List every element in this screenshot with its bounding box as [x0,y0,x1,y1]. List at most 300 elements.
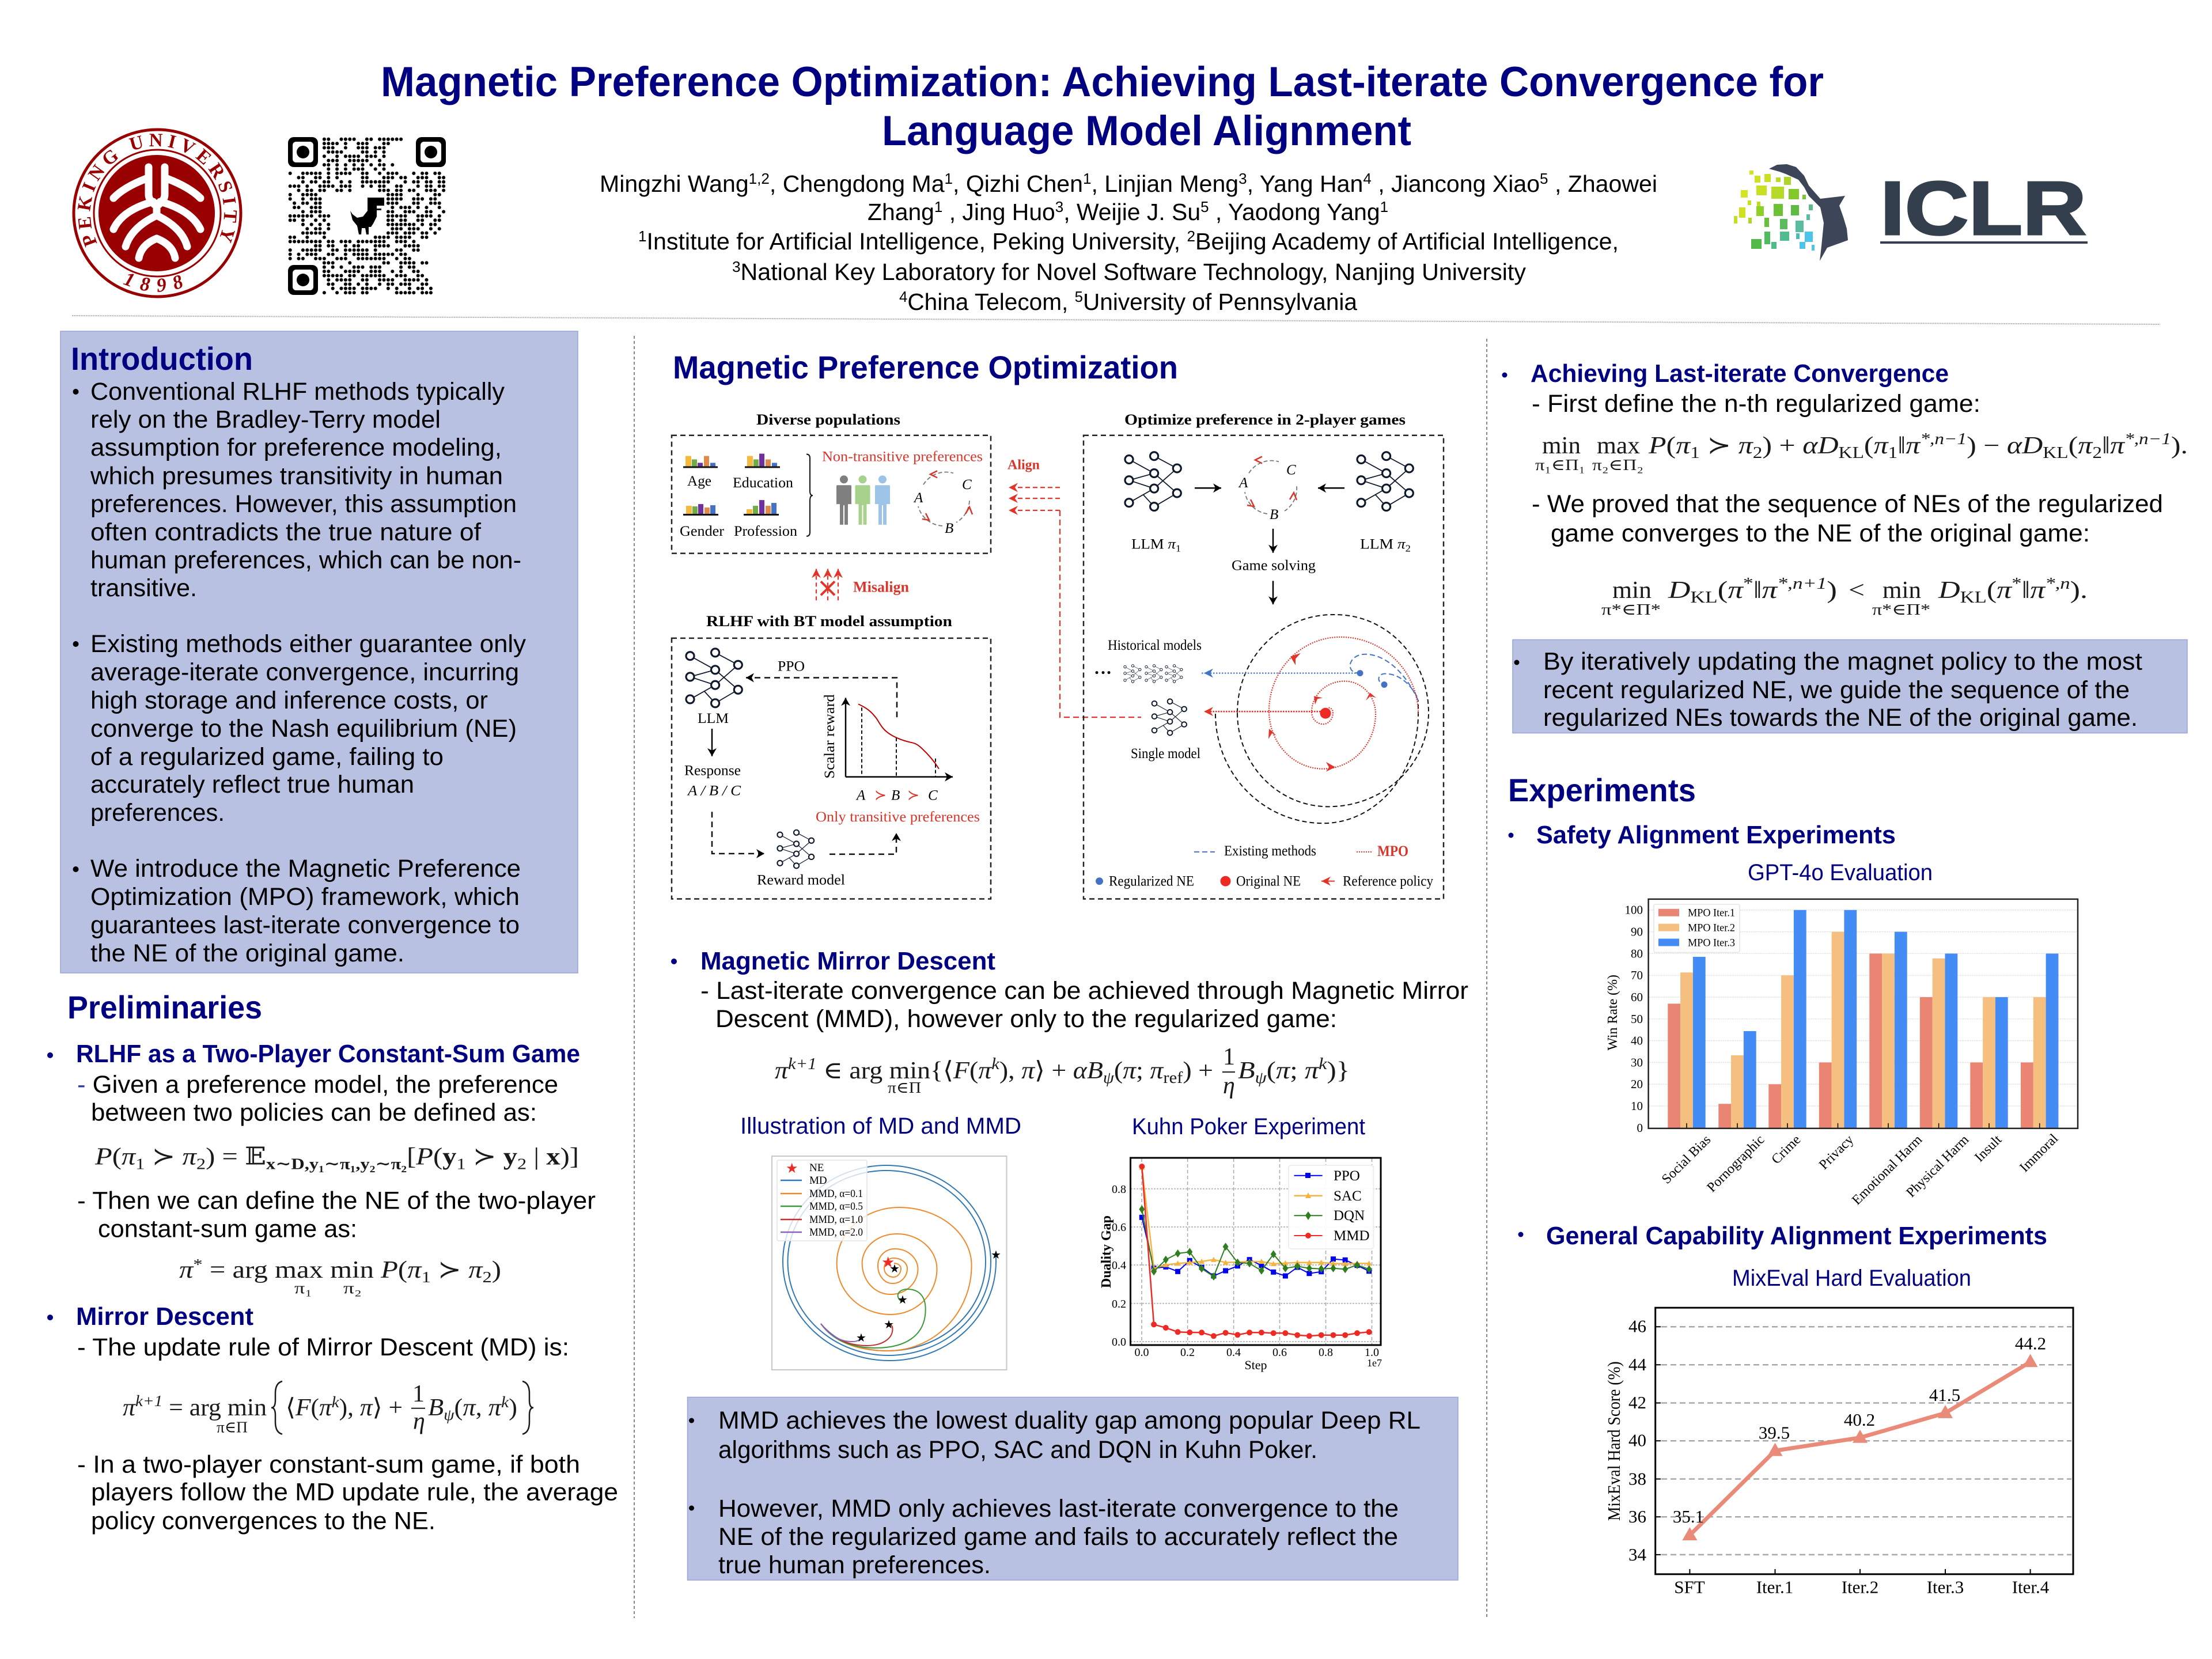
caption: GPT-4o evaluation: GPT-4o Evaluation [1748,860,1933,885]
text block: RLHF as a two-player constant-sum game: x∼D,y₁∼π₁,y₂∼π₂ [266,1156,407,1173]
panel: optimize preference in 2-player games: Historical models [1108,638,1202,653]
text block: RLHF as a two-player constant-sum game: π [179,1257,194,1283]
subheading: safety alignment experiments: Safety Alignment Experiments [1536,821,1896,849]
chart: MixEval hard score line chart: 44.2 [2015,1333,2046,1353]
authors and affiliations: Institute for Artificial Intelligence, Peking University, [647,228,1187,255]
formula: convergence inequality: π [1762,577,1778,604]
text block: RLHF as a two-player constant-sum game: - Given a preference model, the preference [77,1071,558,1099]
text block: RLHF as a two-player constant-sum game: 1 [135,1156,145,1173]
authors and affiliations: , Chengdong Ma [770,171,945,197]
chart: MixEval hard score line chart: 36 [1628,1506,1646,1527]
chart: MixEval hard score line chart: 42 [1628,1392,1646,1412]
formula: regularized game: ( [2069,433,2078,459]
formula: regularized game: *,n−1 [2124,430,2171,448]
legend: spiral legend [777,1160,867,1241]
authors and affiliations: 5 [1075,288,1083,305]
title: Language Model Alignment [882,108,1411,154]
authors and affiliations: Zhang [868,199,934,225]
legend: spiral legend: MD [809,1175,827,1187]
text block: magnetic mirror descent: ) + [1183,1058,1213,1084]
legend: figure legend [1096,843,1433,889]
formula: regularized game: KL [1839,444,1864,462]
chart: Kuhn poker duality gap: 0.6 [1272,1346,1287,1359]
authors and affiliations: National Key Laboratory for Novel Software Technology, Nanjing University [741,259,1526,285]
authors and affiliations: 1,2 [749,170,770,187]
text block: RLHF as a two-player constant-sum game: constant-sum game as: [98,1215,357,1243]
text block: magnetic mirror descent [671,947,1468,1099]
chart: win rate bar chart: 50 [1631,1012,1643,1026]
text block: achieving last-iterate convergence: game converges to the NE of the original game: [1551,520,2090,547]
chart: win rate bar chart: 30 [1631,1055,1643,1069]
icon: ICLR logo: ICLR [1880,166,2086,251]
chart: Kuhn poker duality gap [1099,1158,1382,1372]
chart: win rate bar chart [1605,899,2078,1208]
authors and affiliations: 1 [934,198,942,215]
chart: MixEval hard score line chart: Iter.4 [2012,1577,2049,1597]
text block: magnetic mirror descent: π [775,1058,789,1084]
chart: Kuhn poker duality gap: 0.4 [1112,1259,1126,1272]
callout: MMD findings: algorithms such as PPO, SAC and DQN in Kuhn Poker. [718,1436,1317,1464]
text block: RLHF as a two-player constant-sum game: ≻ [145,1144,183,1171]
formula: convergence inequality: D [1938,577,1960,604]
text block: achieving last-iterate convergence: - We proved that the sequence of NEs of the regularized [1532,490,2163,518]
text block: introduction bullets: rely on the Bradley-Terry model [90,406,441,433]
chart: Kuhn poker duality gap: 0.8 [1112,1183,1126,1196]
chart: Kuhn poker duality gap: 1e7 [1367,1357,1382,1369]
authors and affiliations: 1 [638,228,647,245]
authors and affiliations: 3 [1238,170,1247,187]
chart: win rate bar chart: Social Bias [1659,1132,1714,1187]
icon: QR code [288,137,448,295]
panel: RLHF with BT model assumption: RLHF with BT model assumption [706,613,953,630]
text block: RLHF as a two-player constant-sum game: ≻ [466,1144,503,1171]
text block: introduction bullets: often contradicts the true nature of [90,518,482,546]
text block: introduction bullets: Existing methods either guarantee only [90,630,527,658]
chart: scalar reward curve: ≻ [874,787,887,803]
caption: Kuhn poker experiment: Kuhn Poker Experiment [1132,1114,1365,1139]
chart: win rate bar chart: 80 [1631,946,1643,960]
chart: scalar reward curve: Scalar reward [822,694,838,779]
callout: MMD findings [688,1397,1458,1580]
text block: introduction bullets: the NE of the original game. [90,940,404,967]
formula: regularized game: π [2078,433,2093,459]
formula: regularized game: P(π [1649,433,1688,459]
text block: RLHF as a two-player constant-sum game: ≻ [431,1257,468,1283]
panel: diverse populations: Diverse populations [756,411,900,428]
callout: magnet policy: recent regularized NE, we guide the sequence of the [1543,676,2130,704]
chart: win rate bar chart: Privacy [1816,1132,1857,1173]
chart: Kuhn poker duality gap: 0.6 [1112,1221,1126,1234]
formula: convergence inequality: ‖ [2022,577,2030,604]
text block: magnetic mirror descent: Descent (MMD), however only to the regularized game: [715,1005,1337,1033]
chart: MD and MMD spirals: ★ [856,1331,866,1344]
formula: convergence inequality: ) [1827,577,1837,604]
legend: algorithm legend: SAC [1334,1188,1362,1204]
text block: RLHF as a two-player constant-sum game: π [183,1144,197,1171]
annotation: misalign arrows: Misalign [853,578,910,595]
authors and affiliations: , Yaodong Yang [1209,199,1380,225]
text block: RLHF as a two-player constant-sum game: 1 [456,1156,466,1173]
formula: convergence inequality: ( [1987,577,1997,604]
text block: mirror descent: π [123,1395,136,1421]
text block: introduction bullets: Optimization (MPO) framework, which [90,883,520,911]
text block: RLHF as a two-player constant-sum game: 2 [483,1268,492,1286]
chart: MixEval hard score line chart: 41.5 [1929,1385,1960,1405]
text block: mirror descent: π∈Π [217,1419,248,1436]
chart: win rate bar chart: Win Rate (%) [1605,975,1620,1051]
panel: diverse populations: Non-transitive preferences [822,449,983,464]
chart: win rate bar chart: 40 [1631,1034,1643,1048]
panel: optimize preference in 2-player games: LLM π [1131,537,1175,552]
legend: algorithm legend: MMD [1334,1228,1370,1244]
chart: win rate bar chart: Emotional Harm [1849,1132,1926,1208]
chart: Kuhn poker duality gap: 0.0 [1112,1336,1126,1349]
chart: Kuhn poker duality gap: Step [1244,1358,1267,1372]
chart: Kuhn poker duality gap: Duality Gap [1099,1215,1114,1288]
text block: RLHF as a two-player constant-sum game [47,1040,596,1297]
callout: MMD findings: However, MMD only achieves last-iterate convergence to the [718,1495,1399,1522]
legend: figure legend: Existing methods [1224,843,1316,859]
legend: spiral legend: MMD, α=1.0 [809,1214,863,1226]
icon: preference cycle A B C [913,471,972,536]
text block: magnetic mirror descent: ( [1267,1058,1276,1084]
chart: win rate bar chart: 60 [1631,990,1643,1004]
callout: MMD findings: NE of the regularized game and fails to accurately reflect the [718,1523,1398,1551]
chart: scalar reward curve [822,694,953,803]
chart: win rate bar chart: Crime [1768,1132,1804,1167]
formula: convergence inequality: π*∈Π* [1601,601,1661,618]
formula: regularized game: 1 [1888,444,1897,462]
panel: diverse populations: Age [687,474,711,489]
chart: win rate bar chart: Insult [1972,1132,2005,1165]
text block: magnetic mirror descent: Magnetic Mirror Descent [700,947,995,975]
icon: LLM pi1 network [1125,452,1181,511]
authors and affiliations: 5 [1540,170,1548,187]
panel: RLHF with BT model assumption: A / B / C [687,783,741,798]
panel: optimize preference in 2-player games: 1 [1176,543,1181,554]
chart: win rate bar chart: 10 [1631,1099,1643,1113]
panel: RLHF with BT model assumption: Reward model [757,873,845,888]
formula: convergence inequality: ‖ [1753,577,1762,604]
formula: convergence inequality: ). [2070,577,2088,604]
panel: RLHF with BT model assumption: LLM [698,711,729,726]
text block: RLHF as a two-player constant-sum game: = arg max min [203,1257,381,1283]
formula: regularized game: ( [1864,433,1874,459]
text block: RLHF as a two-player constant-sum game: π [468,1257,483,1283]
text block: mirror descent: π, π [463,1395,501,1421]
text block: mirror descent: 1 [412,1381,425,1407]
caption: MixEval hard evaluation: MixEval Hard Evaluation [1732,1266,1971,1291]
formula: regularized game: π [1874,433,1889,459]
icon: LLM pi2 network [1357,452,1413,511]
formula: regularized game: ≻ [1700,433,1738,459]
chart: scalar reward curve: ≻ [907,787,919,803]
text block: magnetic mirror descent: k [991,1055,999,1073]
chart: win rate bar chart: Immoral [2017,1131,2061,1175]
icon: LLM network [686,649,742,707]
callout: magnet policy [1513,639,2187,733]
icon: preference cycle: B [1270,507,1278,522]
icon: preference cycle A B C: A [913,490,923,506]
text block: introduction bullets: which presumes transitivity in human [90,462,503,490]
text block: introduction bullets: converge to the Nash equilibrium (NE) [90,715,517,743]
icon: Peking University seal: 1898 [123,274,182,292]
icon: ICLR logo [1734,164,2088,261]
text block: RLHF as a two-player constant-sum game: π₁ [294,1279,312,1297]
formula: convergence inequality: π [1728,577,1744,604]
formula: regularized game: π₁∈Π₁ [1535,456,1585,474]
chart: MixEval hard score line chart: Iter.1 [1756,1577,1793,1597]
formula: convergence inequality: *,n+1 [1777,575,1827,593]
formula: regularized game: π [2110,433,2125,459]
text block: mirror descent: B [428,1395,444,1421]
figure: MPO overview diagram [672,411,1444,899]
text block: magnetic mirror descent: k+1 [788,1055,817,1073]
authors and affiliations: , Weijie J. Su [1063,199,1200,225]
icon: Peking University seal [73,128,242,298]
formula: convergence inequality [1601,575,2088,618]
text block: magnetic mirror descent: B [1238,1058,1255,1084]
chart: Kuhn poker duality gap: 1.0 [1365,1346,1379,1359]
icon: people [836,475,890,525]
chart: Kuhn poker duality gap: 0.0 [1135,1346,1149,1359]
formula: regularized game: 2 [1753,444,1762,462]
formula: regularized game: 1 [1690,444,1700,462]
legend: spiral legend: MMD, α=2.0 [809,1226,863,1238]
formula: regularized game: min [1542,433,1581,459]
text block: RLHF as a two-player constant-sum game: [ [407,1144,416,1171]
legend: algorithm legend: DQN [1334,1208,1365,1224]
text block: RLHF as a two-player constant-sum game: 1 [422,1268,431,1286]
text block: introduction bullets [73,378,527,967]
text block: mirror descent [47,1302,618,1535]
panel: RLHF with BT model assumption: Only transitive preferences [816,809,980,825]
text block: RLHF as a two-player constant-sum game: 2 [196,1156,206,1173]
chart: MixEval hard score line chart: SFT [1674,1577,1705,1597]
chart: scalar reward curve: A [855,787,866,803]
legend: MPO iterations: MPO Iter.1 [1688,907,1735,919]
icon: Peking University seal: PEKING UNIVERSITY [77,134,237,248]
annotation: align arrows: Align [1007,457,1040,472]
chart: Kuhn poker duality gap: 0.8 [1319,1346,1333,1359]
heading: experiments: Experiments [1508,772,1696,808]
icon: preference cycle: C [1286,462,1296,478]
panel: diverse populations: Gender [680,524,725,539]
formula: convergence inequality: π*∈Π* [1872,601,1930,618]
chart: MD and MMD spirals: ★ [884,1317,894,1331]
chart: scalar reward curve: B [891,787,900,803]
title: Magnetic Preference Optimization: Achieving Last-iterate Convergence for [381,59,1824,105]
callout: magnet policy: regularized NEs towards the NE of the original game. [1543,704,2138,732]
text block: introduction bullets: preferences. However, this assumption [90,490,517,518]
legend: spiral legend: ★ [786,1160,798,1176]
chart: win rate bar chart: Physical Harm [1903,1132,1972,1200]
chart: MD and MMD spirals [772,1156,1007,1370]
chart: MD and MMD spirals: ★ [881,1254,895,1271]
legend: spiral legend: NE [809,1162,824,1174]
icon: preference cycle A B C: B [945,521,953,536]
text block: mirror descent: ψ [444,1406,454,1424]
text block: introduction bullets: preferences. [90,799,225,827]
text block: RLHF as a two-player constant-sum game: y [503,1144,517,1171]
text block: mirror descent: ) [509,1395,517,1421]
text block: introduction bullets: assumption for preference modeling, [90,434,502,461]
icon: reward model network [777,830,814,868]
legend: MPO iterations: MPO Iter.3 [1688,937,1735,949]
panel: diverse populations [672,411,991,554]
text block: RLHF as a two-player constant-sum game: P(y [416,1144,454,1171]
authors and affiliations: , Yang Han [1247,171,1363,197]
chart: Kuhn poker duality gap: 0.4 [1226,1346,1241,1359]
panel: introduction [60,331,578,973]
text block: magnetic mirror descent: )} [1327,1058,1350,1084]
text block: magnetic mirror descent: π; π [1123,1058,1162,1084]
text block: magnetic mirror descent: 1 [1223,1044,1235,1070]
panel: optimize preference in 2-player games: Optimize preference in 2-player games [1124,411,1406,428]
text block: mirror descent: ⟨F(π [286,1395,331,1421]
chart: win rate bar chart: Pornographic [1704,1132,1767,1195]
authors and affiliations: 2 [1187,228,1195,245]
subheading: general capability alignment experiments: General Capability Alignment Experiments [1546,1222,2047,1250]
icon: single model network [1152,699,1187,735]
legend: MPO iterations [1654,904,1740,952]
text block: RLHF as a two-player constant-sum game: - Then we can define the NE of the two-player [77,1187,596,1214]
annotation: misalign arrows [816,569,910,600]
chart: MixEval hard score line chart [1604,1308,2073,1597]
chart: MixEval hard score line chart: Iter.3 [1927,1577,1964,1597]
text block: RLHF as a two-player constant-sum game: RLHF as a Two-Player Constant-Sum Game [76,1040,580,1068]
formula: regularized game: αD [2007,433,2043,459]
authors and affiliations: , Zhaowei [1548,171,1657,197]
authors and affiliations: 4 [1363,170,1372,187]
chart: win rate bar chart: 100 [1625,903,1643,917]
panel: diverse populations: Education [733,475,794,491]
text block: magnetic mirror descent: ref [1163,1069,1183,1087]
text block: mirror descent: η [413,1408,425,1435]
text block: mirror descent: ( [454,1395,463,1421]
text block: magnetic mirror descent: π; π [1276,1058,1317,1084]
caption: illustration of MD and MMD: Illustration of MD and MMD [740,1113,1021,1139]
legend: figure legend: MPO [1377,843,1408,859]
text block: introduction bullets: average-iterate convergence, incurring [90,658,519,686]
text block: mirror descent: policy convergences to the NE. [91,1507,435,1535]
text block: introduction bullets: of a regularized game, failing to [90,743,444,771]
text block: introduction bullets: high storage and inference costs, or [90,687,488,714]
text block: mirror descent: k [332,1393,339,1411]
text block: magnetic mirror descent: π⟩ + αB [1021,1058,1100,1084]
legend: spiral legend: MMD, α=0.1 [809,1188,863,1200]
title [381,59,1824,154]
text block: mirror descent: players follow the MD update rule, the average [91,1479,618,1506]
chart: MixEval hard score line chart: 44 [1628,1354,1646,1374]
authors and affiliations: 1 [945,170,953,187]
formula: convergence inequality: * [2012,575,2022,593]
text block: introduction bullets: human preferences, which can be non- [90,546,521,574]
formula: regularized game: αD [1802,433,1839,459]
legend: figure legend: Reference policy [1343,874,1433,889]
chart: win rate bar chart: 0 [1637,1121,1643,1135]
authors and affiliations [600,170,1657,315]
text block: mirror descent: - The update rule of Mirror Descent (MD) is: [77,1334,569,1361]
formula: regularized game: *,n−1 [1920,430,1967,448]
chart: MixEval hard score line chart: 40 [1628,1430,1646,1450]
authors and affiliations: 4 [899,288,907,305]
legend: algorithm legend: PPO [1334,1168,1360,1184]
text block: magnetic mirror descent: ψ [1103,1069,1115,1087]
text block: introduction bullets: accurately reflect true human [90,771,414,798]
panel: diverse populations: Profession [734,524,798,539]
panel: optimize preference in 2-player games: LLM π [1360,537,1404,552]
authors and affiliations: , Jing Huo [942,199,1055,225]
panel: optimize preference in 2-player games [1084,411,1444,899]
text block: mirror descent: ), [339,1395,360,1421]
formula: convergence inequality: KL [1960,589,1987,607]
authors and affiliations: , Linjian Meng [1091,171,1238,197]
text block: RLHF as a two-player constant-sum game: x)] [546,1144,577,1171]
callout: magnet policy: By iteratively updating the magnet policy to the most [1543,647,2142,675]
formula: convergence inequality: π [2030,577,2046,604]
chart: win rate bar chart: 90 [1631,925,1643,939]
authors and affiliations: 5 [1200,198,1209,215]
chart: scalar reward curve: C [928,787,938,803]
text block: RLHF as a two-player constant-sum game: P(π [95,1144,134,1171]
legend: figure legend: Regularized NE [1109,874,1194,889]
text block: RLHF as a two-player constant-sum game: ) = 𝔼 [206,1144,266,1171]
formula: convergence inequality: * [1743,575,1753,593]
text block: magnetic mirror descent: ), [999,1058,1021,1084]
text block: magnetic mirror descent: π∈Π [888,1079,921,1096]
text block: magnetic mirror descent: η [1223,1073,1235,1099]
authors and affiliations: 1 [1380,198,1388,215]
chart: MixEval hard score line chart: 38 [1628,1468,1646,1488]
chart: MixEval hard score line chart: MixEval Hard Score (%) [1604,1361,1624,1521]
text block: achieving last-iterate convergence: Achieving Last-iterate Convergence [1531,359,1949,388]
text block: introduction bullets: We introduce the Magnetic Preference [90,855,521,882]
icon: demographic bar groups [683,454,780,516]
formula: regularized game: 2 [2092,444,2102,462]
panel: RLHF with BT model assumption: PPO [778,659,805,675]
chart: MixEval hard score line chart: 34 [1628,1544,1646,1565]
text block: magnetic mirror descent: ∈ arg min{⟨ [817,1058,953,1084]
authors and affiliations: Beijing Academy of Artificial Intelligence, [1195,228,1619,255]
text block: RLHF as a two-player constant-sum game: * [193,1256,203,1274]
heading: magnetic preference optimization: Magnetic Preference Optimization [673,349,1178,385]
text block: magnetic mirror descent: - Last-iterate convergence can be achieved through Magnetic Mirror [700,977,1468,1005]
formula: convergence inequality: *,n [2045,575,2070,593]
legend: figure legend: Original NE [1236,874,1301,889]
text block: mirror descent: = arg min [162,1395,267,1421]
formula: regularized game: ) − [1967,433,2007,459]
formula: regularized game [1535,430,2188,474]
callout: MMD findings: true human preferences. [718,1551,991,1579]
icon: preference cycle [1238,457,1297,522]
callout: MMD findings: MMD achieves the lowest duality gap among popular Deep RL [718,1407,1421,1434]
text block: achieving last-iterate convergence: - First define the n-th regularized game: [1532,390,1980,418]
text block: mirror descent: k [501,1393,509,1411]
formula: convergence inequality: ( [1718,577,1728,604]
authors and affiliations: , Qizhi Chen [953,171,1083,197]
text block: introduction bullets: transitive. [90,574,197,602]
heading: introduction: Introduction [71,340,253,377]
legend: spiral legend: MMD, α=0.5 [809,1200,863,1213]
icon: preference cycle A B C: C [962,477,972,493]
authors and affiliations: Mingzhi Wang [600,171,748,197]
text block: RLHF as a two-player constant-sum game: 2 [517,1156,527,1173]
diagram: convergence spirals [1202,615,1429,823]
formula: regularized game: ). [2171,433,2188,459]
chart: Kuhn poker duality gap: 0.2 [1112,1298,1126,1310]
text block: RLHF as a two-player constant-sum game: P(π [381,1257,419,1283]
